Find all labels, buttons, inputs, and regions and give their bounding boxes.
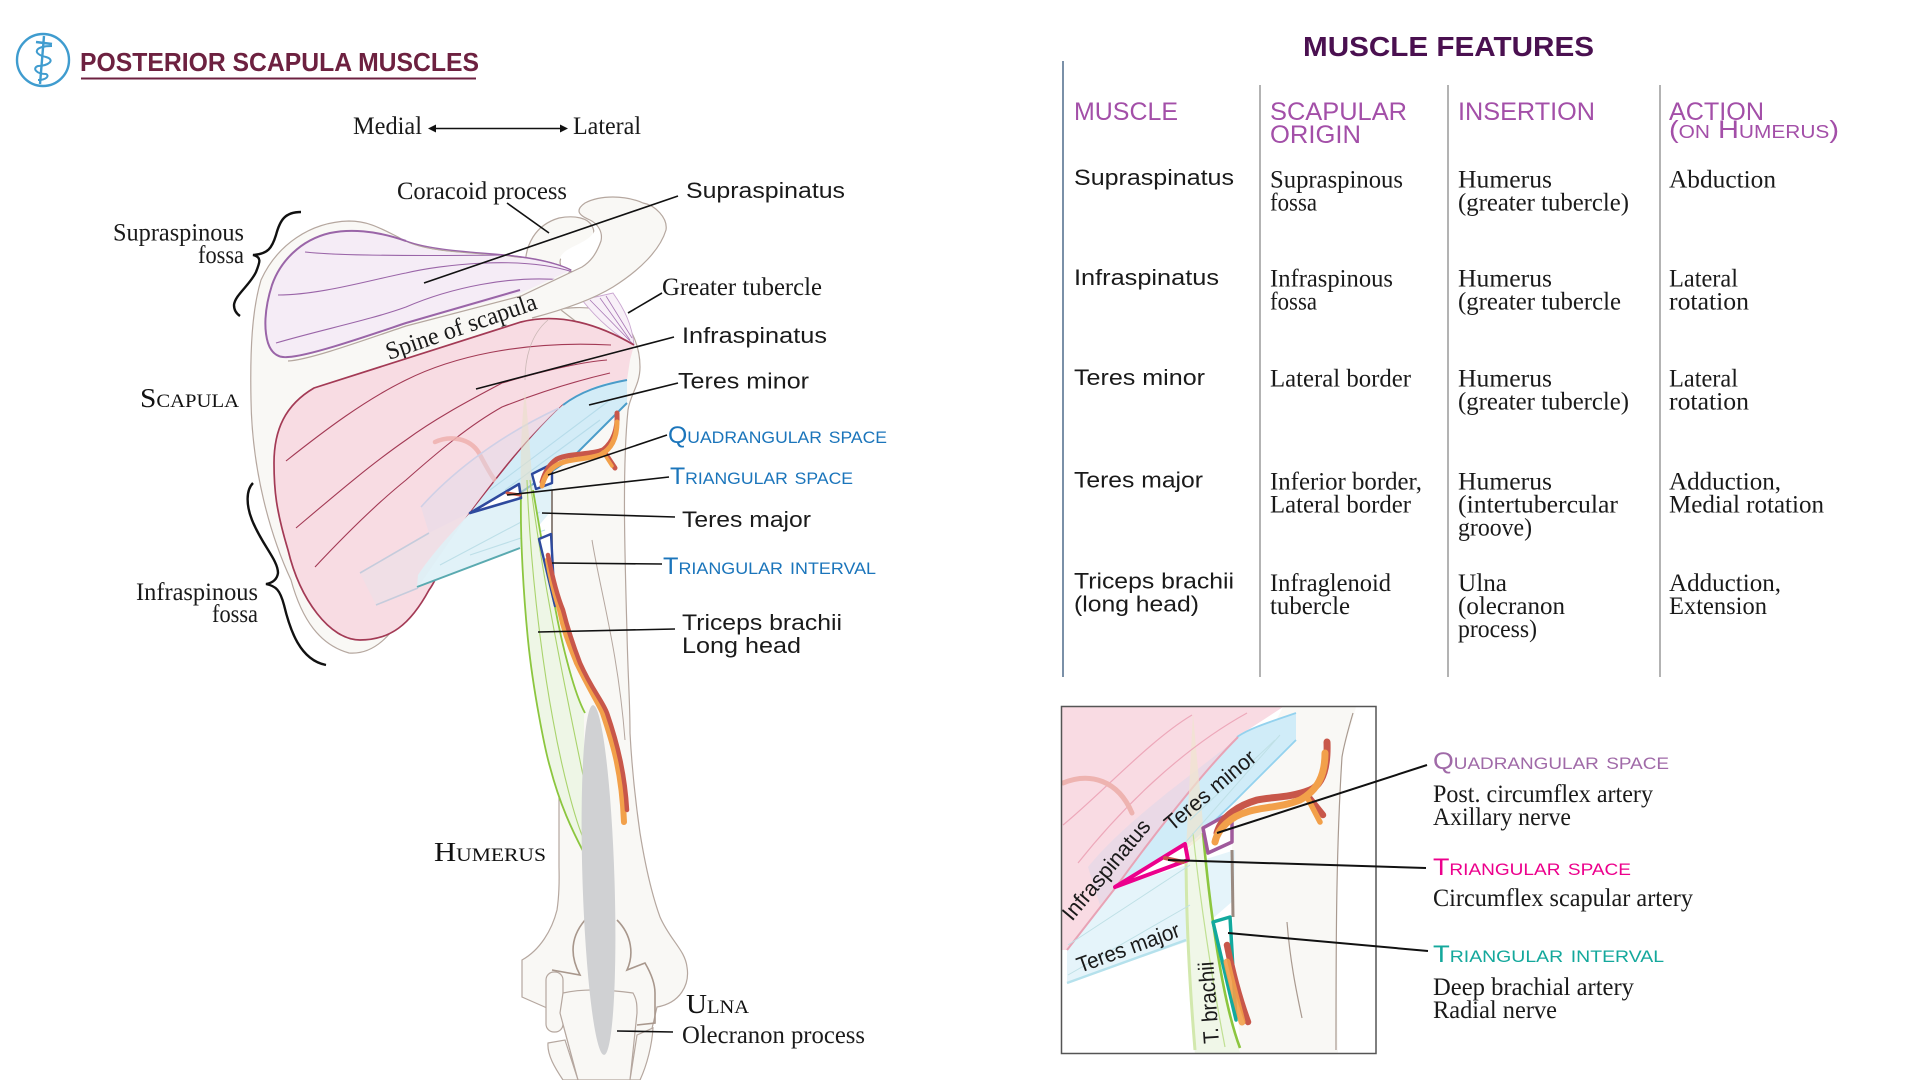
faint humerus shaft line <box>592 540 625 740</box>
bone detail lines <box>551 490 553 560</box>
row: teres major: Adduction, <box>1669 468 1781 496</box>
panel: inset close-up of spaces <box>1057 706 1376 1055</box>
anatomy labels: Long head <box>682 633 801 658</box>
row: triceps brachii: Adduction, <box>1669 570 1781 597</box>
inset: triceps borders <box>1186 850 1195 1050</box>
anatomy labels: Teres major <box>682 507 811 532</box>
muscle: supraspinatus <box>265 230 573 357</box>
icon: medical logo <box>17 34 69 86</box>
column headers: ORIGIN <box>1270 121 1361 149</box>
muscle: teres major <box>360 478 552 605</box>
row: triceps brachii: process) <box>1458 616 1537 643</box>
inset: humerus region <box>1232 707 1356 1053</box>
inset: triangular interval marker <box>1213 917 1236 1020</box>
anatomy labels <box>113 178 887 1049</box>
anatomy labels: Greater tubercle <box>662 274 822 301</box>
row: triceps brachii: Ulna <box>1458 570 1507 597</box>
row: teres major: groove) <box>1458 514 1532 542</box>
row: teres minor: rotation <box>1669 388 1750 416</box>
inset: teres major edge <box>1067 940 1186 983</box>
anatomy labels: Infraspinatus <box>682 323 827 348</box>
quadrangular space outline <box>532 464 552 489</box>
row: teres major: (intertubercular <box>1458 492 1619 518</box>
row: supraspinatus <box>1074 165 1777 216</box>
row: teres minor: (greater tubercle) <box>1458 388 1629 416</box>
inset: teres major <box>1067 850 1235 983</box>
row: teres major: Teres major <box>1074 468 1203 492</box>
anatomy labels: Humerus <box>434 837 546 867</box>
row: supraspinatus: Abduction <box>1669 166 1777 194</box>
row: triceps brachii: Extension <box>1669 593 1767 620</box>
row: teres major: Inferior border, <box>1270 468 1422 496</box>
inset legend: triangular space <box>1433 854 1693 912</box>
triangular space outline <box>470 484 521 513</box>
row: infraspinatus: Humerus <box>1458 266 1552 292</box>
anatomy labels: Coracoid process <box>397 178 567 205</box>
orientation arrow: medial to lateral: Lateral <box>573 113 641 140</box>
triangular interval outline <box>539 534 555 606</box>
row: infraspinatus: Lateral <box>1669 266 1738 292</box>
row: supraspinatus: fossa <box>1270 190 1317 216</box>
row: triceps brachii: (long head) <box>1074 592 1199 616</box>
anatomy labels: Triangular space <box>670 463 853 490</box>
inset legend: quadrangular space <box>1433 748 1669 831</box>
orientation arrow: medial to lateral <box>353 113 641 140</box>
gap between coracoid and acromion <box>560 228 600 270</box>
row: triceps brachii: tubercle <box>1270 593 1350 620</box>
anatomy labels: fossa <box>212 601 258 628</box>
anatomy labels: Ulna <box>686 989 749 1019</box>
row: triceps brachii: (olecranon <box>1458 593 1565 620</box>
inset: humeral lines <box>1232 850 1233 917</box>
row: teres major: Humerus <box>1458 468 1552 496</box>
inset: infraspinatus region <box>1062 707 1283 950</box>
column headers: SCAPULAR <box>1270 98 1407 126</box>
row: teres minor <box>1074 365 1750 416</box>
row: infraspinatus: Infraspinous <box>1270 266 1393 292</box>
column headers <box>1074 98 1839 149</box>
row: supraspinatus: (greater tubercle) <box>1458 190 1629 216</box>
row: teres major: Medial rotation <box>1669 492 1824 518</box>
brace: supraspinous fossa <box>234 212 301 316</box>
inset legend: triangular space: Circumflex scapular artery <box>1433 885 1693 912</box>
coracoid process <box>525 217 594 268</box>
elbow bones <box>546 920 655 1080</box>
inset: infraspinatus edge <box>1067 737 1238 950</box>
title: POSTERIOR SCAPULA MUSCLES <box>80 47 479 77</box>
row: supraspinatus: Supraspinatus <box>1074 165 1234 190</box>
row: infraspinatus <box>1074 265 1750 316</box>
inset: teres minor <box>1115 713 1296 887</box>
anatomy labels: Supraspinatus <box>686 178 845 203</box>
inset: triceps <box>1185 833 1241 1055</box>
inset legend: quadrangular space: Quadrangular space <box>1433 748 1669 775</box>
row: teres minor: Lateral <box>1669 366 1738 392</box>
row: supraspinatus: Supraspinous <box>1270 166 1403 194</box>
inset legend: quadrangular space: Post. circumflex artery <box>1433 781 1653 808</box>
inset: teres minor edges <box>1214 712 1296 820</box>
inset legend: triangular space: Triangular space <box>1433 854 1631 881</box>
anatomy labels: fossa <box>198 242 244 269</box>
column headers: INSERTION <box>1458 98 1595 126</box>
row: triceps brachii <box>1074 568 1781 643</box>
row: triceps brachii: Infraglenoid <box>1270 570 1391 597</box>
row: infraspinatus: rotation <box>1669 288 1750 316</box>
leader lines <box>424 196 678 1032</box>
inset legend: triangular interval: Radial nerve <box>1433 997 1557 1024</box>
row: teres major: Lateral border <box>1270 492 1412 518</box>
column headers: MUSCLE <box>1074 98 1178 126</box>
anatomy labels: Quadrangular space <box>668 422 887 449</box>
row: supraspinatus: Humerus <box>1458 166 1552 194</box>
orientation arrow: medial to lateral: Medial <box>353 113 422 140</box>
inset: rotated muscle labels: T. brachii <box>1193 961 1224 1044</box>
anatomy labels: Triceps brachii <box>682 610 842 635</box>
scapular spine <box>280 197 666 390</box>
inset leader lines <box>1168 765 1428 951</box>
row: teres minor: Teres minor <box>1074 365 1205 390</box>
scapula bone <box>251 221 600 653</box>
row: infraspinatus: fossa <box>1270 288 1317 316</box>
inset legend: triangular interval: Deep brachial artery <box>1433 974 1634 1001</box>
inset: rotated muscle labels <box>1057 745 1261 1044</box>
gray shadow over arm <box>577 705 620 1055</box>
deep brachial artery and radial nerve <box>548 555 627 822</box>
inset: tendon <box>1186 716 1203 848</box>
humerus bone <box>522 308 688 1080</box>
anatomical illustration <box>251 197 688 1080</box>
muscle: teres minor <box>421 380 627 533</box>
anatomy labels: Scapula <box>140 383 239 413</box>
row: teres minor: Humerus <box>1458 366 1552 392</box>
anatomy labels: Olecranon process <box>682 1022 865 1049</box>
label on spine: Spine of scapula <box>382 289 540 366</box>
column headers: ACTION <box>1669 98 1764 126</box>
inset legend: quadrangular space: Axillary nerve <box>1433 804 1571 831</box>
muscle: infraspinatus <box>274 319 634 640</box>
inset: rotated muscle labels: Teres major <box>1073 917 1183 978</box>
inset: triangular space marker <box>1115 844 1188 887</box>
brace: infraspinous fossa <box>248 483 326 665</box>
inset: quadrangular space marker <box>1203 812 1232 853</box>
inset artwork <box>1057 707 1356 1055</box>
table heading: MUSCLE FEATURES <box>1303 31 1594 62</box>
posterior circumflex vessels <box>507 413 617 495</box>
inset: rotated muscle labels: Infraspinatus <box>1057 814 1156 925</box>
row: teres minor: Lateral border <box>1270 366 1412 392</box>
anatomy labels: Supraspinous <box>113 220 244 246</box>
inset legend: triangular interval: Triangular interval <box>1433 941 1664 968</box>
inset: lilac overlay <box>1088 746 1227 904</box>
inset: muscle fibres <box>1063 713 1247 863</box>
inset: vessels <box>1165 742 1327 1022</box>
panel: muscle features table <box>1063 61 1839 677</box>
row: infraspinatus: (greater tubercle <box>1458 288 1621 316</box>
inset: circumflex arc <box>1063 778 1132 813</box>
supraspinatus insertion fan <box>582 293 634 345</box>
inset legend: triangular interval <box>1433 941 1664 1024</box>
row: infraspinatus: Infraspinatus <box>1074 265 1219 290</box>
anatomy labels: Teres minor <box>678 368 809 394</box>
row: teres major <box>1074 468 1824 542</box>
row: triceps brachii: Triceps brachii <box>1074 568 1234 594</box>
anatomy labels: Triangular interval <box>663 553 876 580</box>
column headers: (on Humerus) <box>1669 116 1839 144</box>
muscle: triceps long head <box>521 390 585 853</box>
anatomy labels: Infraspinous <box>136 579 258 606</box>
inset: frame <box>1062 706 1376 1054</box>
inset: rotated muscle labels: Teres minor <box>1159 745 1261 836</box>
